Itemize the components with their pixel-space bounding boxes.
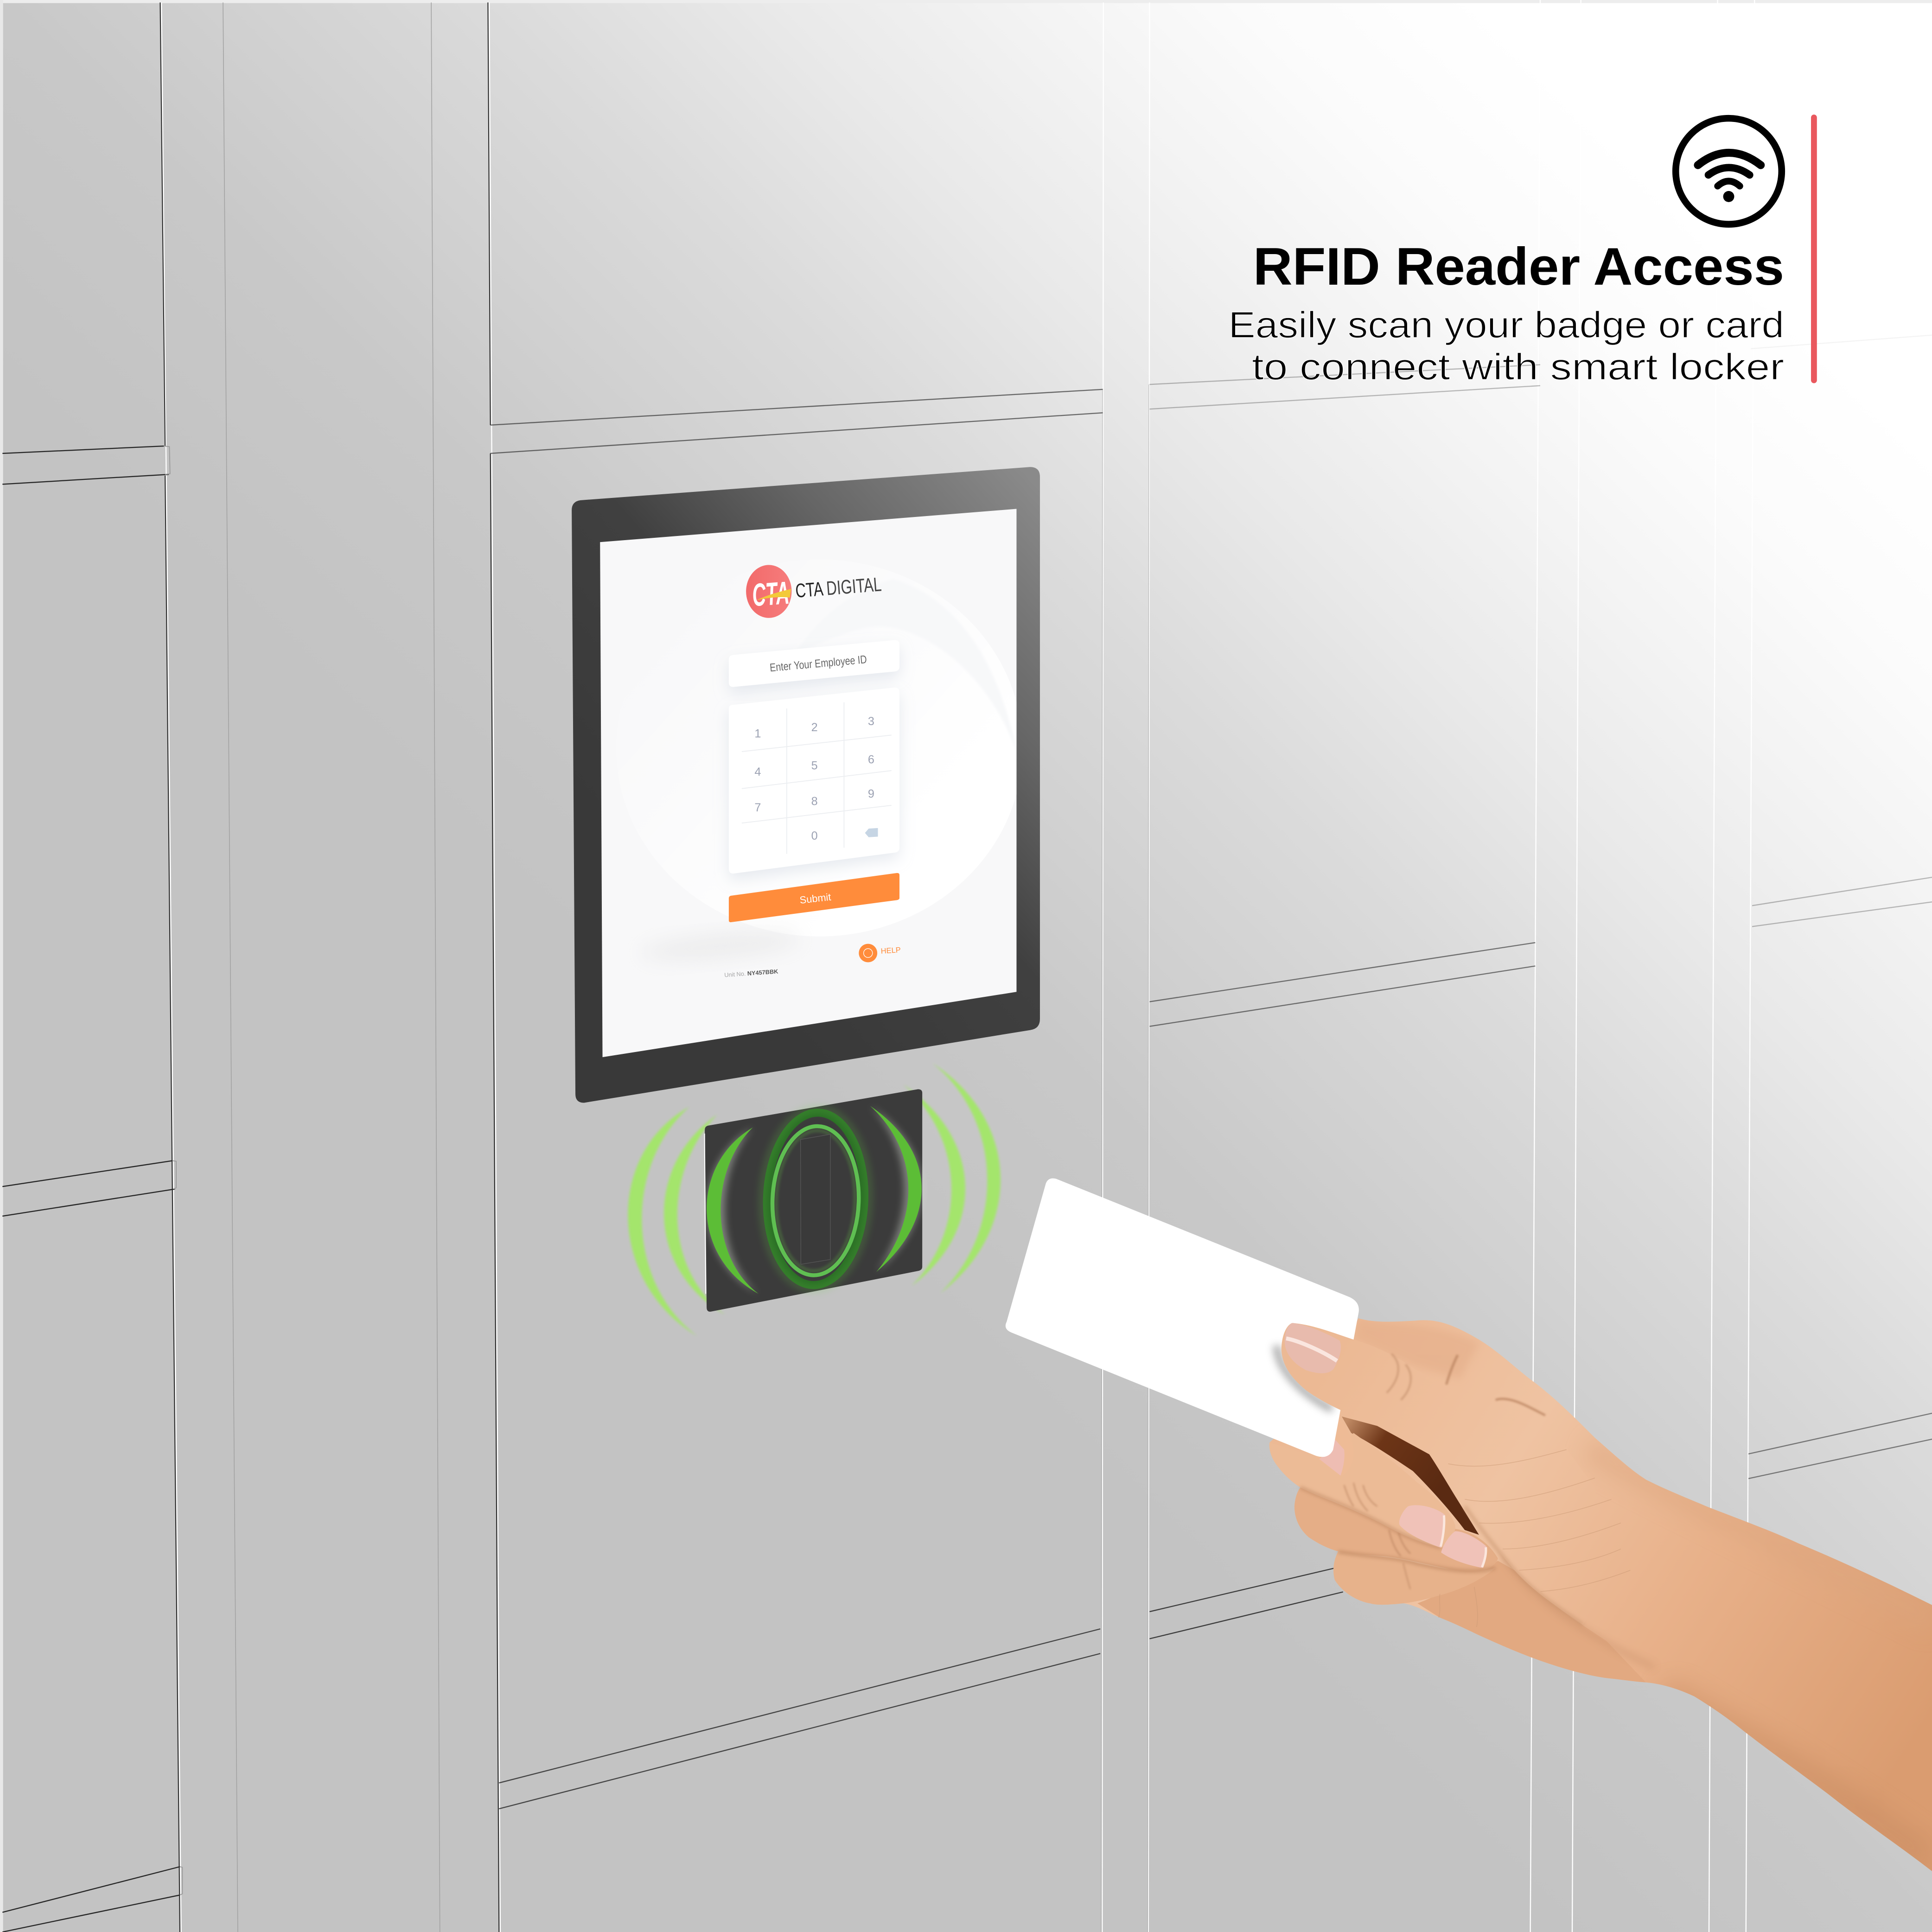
employee ID input: Enter Your Employee ID	[769, 653, 867, 674]
ring and little finger separation	[1338, 1552, 1496, 1571]
thumb and hand over card	[1277, 1323, 1630, 1627]
little finger knuckle crease	[1403, 1563, 1410, 1589]
middle finger	[1269, 1433, 1455, 1548]
inner arc glow	[707, 1106, 922, 1294]
red accent bar	[1811, 115, 1817, 383]
keypad: 8	[811, 795, 818, 808]
submit button: Submit	[799, 891, 832, 906]
keypad: 0	[811, 829, 818, 842]
thumb knuckle creases	[1387, 1354, 1411, 1400]
skin wrinkles	[1439, 1450, 1630, 1627]
index fingernail	[1319, 1438, 1345, 1476]
keypad: 6	[868, 753, 874, 766]
ring finger knuckle wrinkles	[1389, 1530, 1410, 1556]
keypad: 1	[754, 727, 761, 740]
feature callout	[1229, 115, 1817, 388]
help button	[859, 944, 901, 963]
thumb lower edge shading	[1465, 1506, 1583, 1625]
CTA logo	[746, 565, 882, 618]
description text	[1229, 304, 1784, 388]
thumbnail	[1285, 1323, 1341, 1373]
thumbnail tip	[1286, 1339, 1337, 1361]
keypad: 7	[754, 801, 761, 814]
middle finger knuckle wrinkles	[1344, 1483, 1377, 1511]
inner signal arcs	[707, 1106, 922, 1294]
reader plate	[705, 1089, 922, 1312]
shaded skin areas	[1356, 1320, 1932, 1880]
index finger	[1316, 1416, 1353, 1476]
reader plate edge highlight	[705, 1134, 706, 1294]
dark gap between thumb and fingers	[1342, 1416, 1479, 1535]
screen decorative circle	[674, 701, 1016, 956]
arm and back of hand	[1269, 1318, 1932, 1871]
little finger	[1333, 1551, 1496, 1605]
ring finger	[1294, 1487, 1498, 1572]
back of hand crease	[1496, 1399, 1545, 1416]
middle finger underside shadow	[1301, 1487, 1441, 1548]
keypad: 9	[868, 788, 874, 801]
thumb	[1282, 1323, 1607, 1625]
description text: to connect with smart locker	[1252, 346, 1784, 388]
icon: wifi signal in circle	[1676, 118, 1782, 224]
submit button	[729, 873, 899, 922]
keypad: 5	[811, 759, 818, 772]
index knuckle crease	[1446, 1355, 1458, 1384]
screen bezel	[572, 467, 1040, 1103]
hand behind card	[1269, 1318, 1932, 1880]
reader slot	[801, 1135, 830, 1264]
employee ID input	[729, 640, 899, 687]
heading: RFID Reader Access	[1253, 237, 1784, 296]
keypad: 3	[868, 715, 874, 728]
help button: HELP	[880, 946, 901, 956]
CTA logo: CTA	[751, 574, 791, 613]
outer signal arcs left	[628, 1107, 725, 1336]
RFID reader with green signal	[628, 1063, 1001, 1336]
unit number: Unit No. NY457BBK	[724, 968, 779, 978]
hand holding RFID card	[1006, 1179, 1932, 1880]
keypad: 4	[754, 765, 761, 778]
ring fingernail	[1441, 1531, 1486, 1568]
kiosk touchscreen	[572, 467, 1040, 1103]
thumb shadow on card	[1277, 1345, 1333, 1409]
screen display	[600, 509, 1016, 1057]
outer signal arcs right	[904, 1063, 1001, 1293]
RFID card	[1006, 1179, 1359, 1457]
middle fingernail	[1399, 1505, 1445, 1548]
keypad: 2	[811, 721, 818, 734]
keypad	[729, 688, 899, 874]
description text: Easily scan your badge or card	[1229, 304, 1784, 345]
reader ring	[759, 1107, 872, 1291]
CTA logo: CTA DIGITAL	[795, 574, 882, 602]
